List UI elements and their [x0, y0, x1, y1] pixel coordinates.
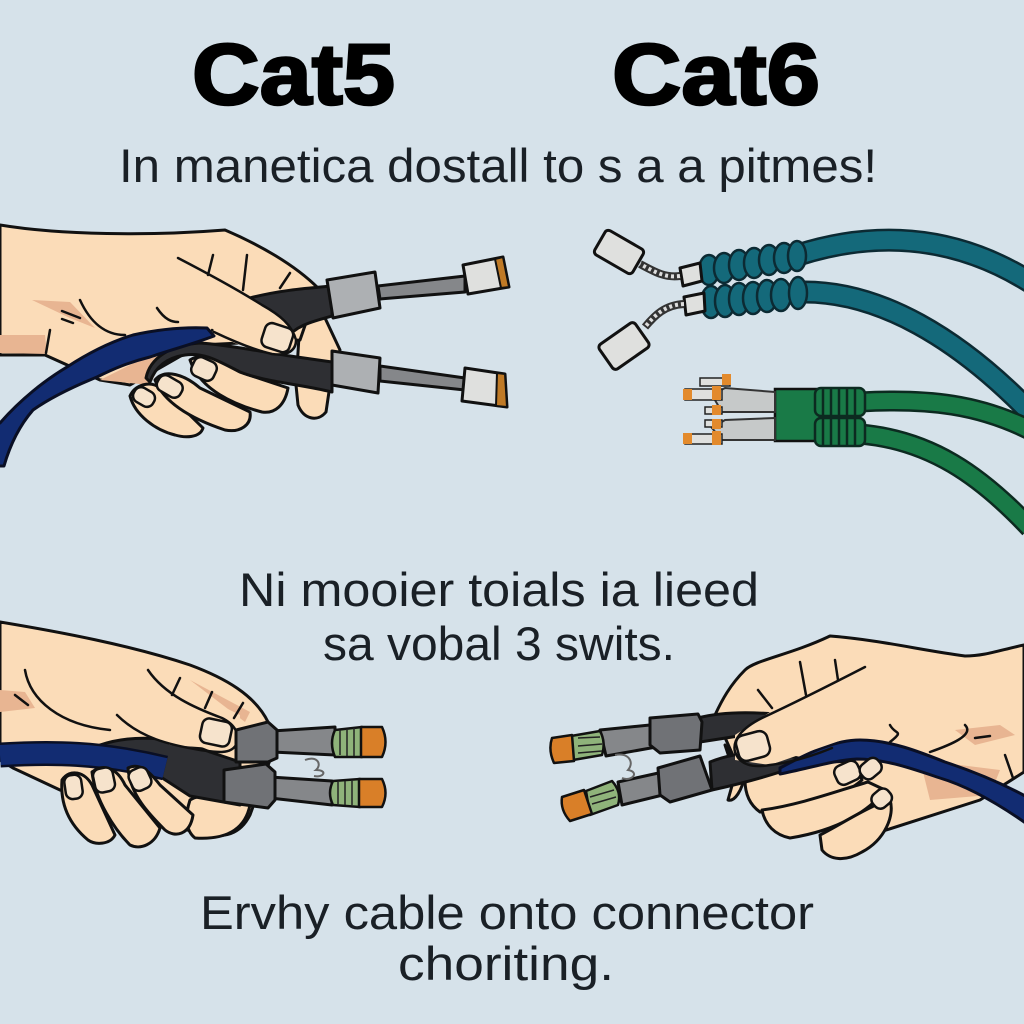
title: Cat5: Cat5 — [192, 27, 395, 123]
connector: bottom-right plugs — [550, 714, 712, 821]
middle text — [239, 563, 759, 670]
middle text: sa vobal 3 swits. — [323, 617, 675, 670]
illustration: bottom-left hand with connectors — [0, 622, 270, 847]
connector: bottom-left plugs — [224, 722, 386, 808]
middle text: Ni mooier toials ia lieed — [239, 563, 759, 616]
bottom text: choriting. — [398, 937, 614, 990]
illustration: top-left hand holding Cat5 cable — [0, 225, 340, 466]
subtitle text: In manetica dostall to s a a pitmes! — [119, 139, 877, 192]
illustration: right green Cat6 cables — [683, 374, 1024, 528]
bottom text — [200, 886, 814, 990]
bottom text: Ervhy cable onto connector — [200, 886, 814, 939]
connector: top-left cable plugs — [327, 257, 509, 407]
illustration: top-right teal Cat6 cables — [593, 229, 1024, 412]
title: Cat6: Cat6 — [612, 27, 820, 123]
illustration: bottom-right hand with connectors — [698, 636, 1024, 859]
